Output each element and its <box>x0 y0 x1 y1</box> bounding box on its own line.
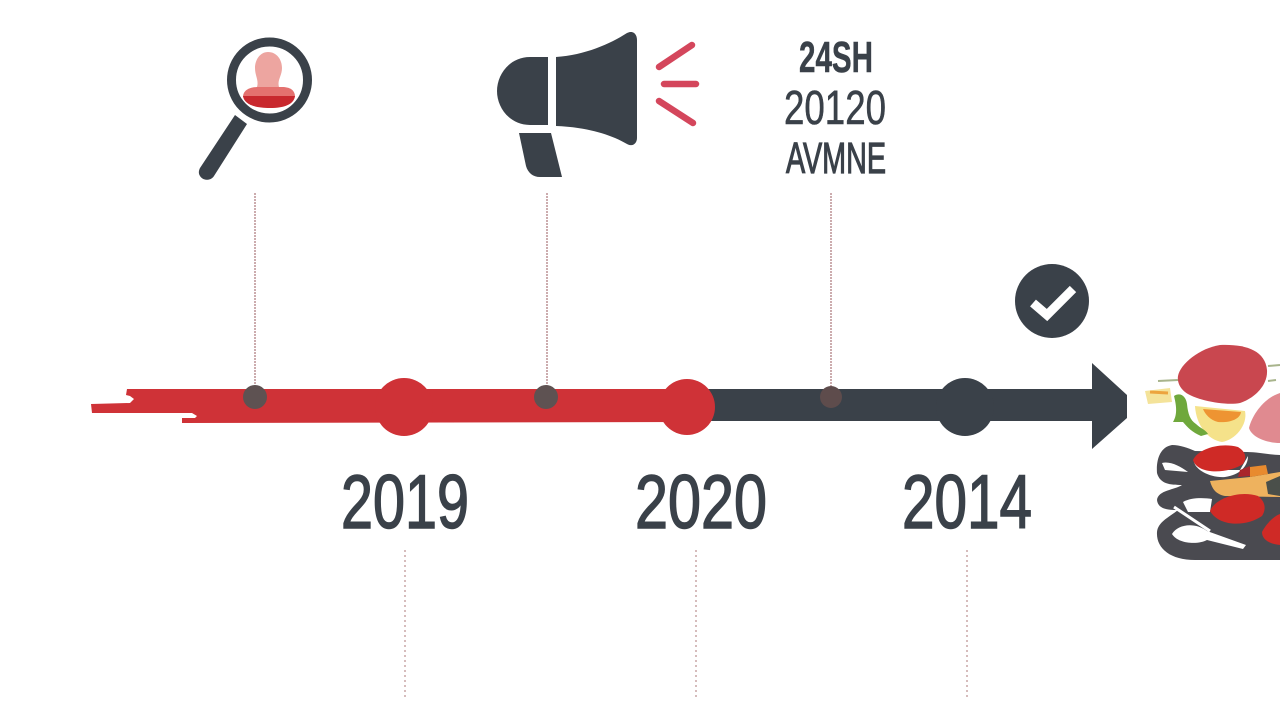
icon: megaphone <box>497 32 696 177</box>
text block: top right label: 24SH <box>799 33 873 82</box>
lower connector lines <box>405 550 967 700</box>
timeline arrow: dark section <box>690 363 1127 449</box>
small marker: second <box>534 385 558 409</box>
timeline bar: red section with brushed tail <box>91 389 690 423</box>
upper connector lines <box>255 193 831 390</box>
text block: top right label: 20120 <box>784 82 886 135</box>
marker: 2019 <box>375 378 433 436</box>
year label: 2019: 2019 <box>341 460 469 545</box>
year label: 2020: 2020 <box>635 460 767 545</box>
year label: 2014: 2014 <box>902 460 1032 545</box>
marker: 2020 <box>659 379 715 435</box>
small marker: third <box>820 386 842 408</box>
text block: top right label: AVMNE <box>786 134 886 183</box>
icon: check badge <box>1015 264 1089 338</box>
small marker: first <box>243 385 267 409</box>
illustration: food collage <box>1145 345 1280 560</box>
marker: 2014 <box>936 378 994 436</box>
text block: top right label <box>784 33 886 183</box>
icon: magnifying glass with person <box>199 42 308 180</box>
